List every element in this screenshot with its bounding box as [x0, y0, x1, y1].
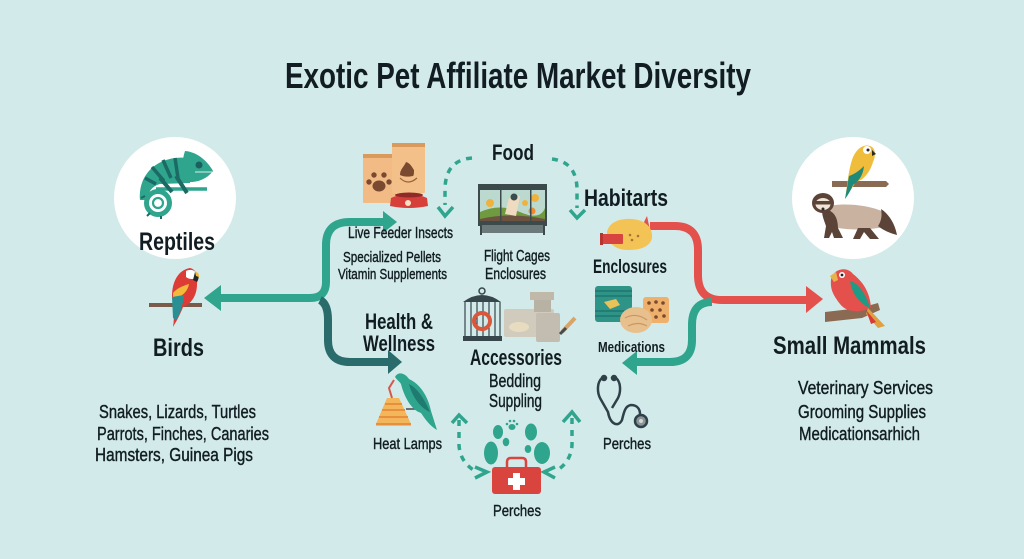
icon: chameleon: [140, 151, 213, 219]
icon: red parrot on branch: [825, 269, 885, 328]
arrow: teal to medications: [622, 302, 712, 375]
text block: left list: Snakes, Lizards, Turtles: [99, 402, 256, 422]
title: Exotic Pet Affiliate Market Diversity: [285, 55, 751, 96]
label: food: Food: [492, 140, 534, 165]
icon: food bags and bowl: [363, 143, 428, 208]
text block: flight cages: Enclosures: [485, 266, 546, 283]
text block: bedding supply: Bedding: [489, 371, 541, 391]
arrow: dark teal to health and wellness: [320, 300, 402, 374]
arrow: red to small mammals: [644, 216, 823, 313]
icon: stethoscope: [598, 376, 647, 427]
text block: bedding supply: [489, 371, 542, 411]
label: heat lamps: Heat Lamps: [373, 436, 442, 453]
arrow: teal to birds and feeder insects: [204, 211, 397, 311]
panel: reptiles badge: [114, 137, 236, 259]
text block: bedding supply: Suppling: [489, 391, 542, 411]
label: health and wellness: Health &: [365, 309, 433, 334]
text block: feeder list: Vitamin Supplements: [338, 266, 447, 283]
text block: right list: Veterinary Services: [798, 378, 933, 398]
text block: feeder list: Live Feeder Insects: [348, 225, 453, 242]
label: health and wellness: [363, 309, 435, 356]
label: habitarts: Habitarts: [584, 185, 668, 212]
icon: first aid kit: [492, 458, 541, 494]
icon: yellow habitat hide: [600, 219, 652, 250]
label: perches bottom: Perches: [493, 503, 541, 520]
text block: right list: [798, 378, 933, 444]
label: accessories: Accessories: [470, 345, 562, 370]
text block: right list: Medicationsarhich: [799, 424, 920, 444]
label: small mammals: Small Mammals: [773, 332, 926, 360]
label: reptiles: Reptiles: [139, 228, 215, 256]
label: health and wellness: Wellness: [363, 331, 435, 356]
text block: left list: Parrots, Finches, Canaries: [97, 424, 269, 444]
icon: yellow parrot on perch: [832, 146, 889, 199]
icon: tin and treats: [595, 286, 669, 333]
dashed arrows: bottom right: [544, 412, 580, 478]
text block: right list: Grooming Supplies: [798, 402, 926, 422]
icon: ferret: [812, 193, 897, 239]
text block: flight cages: [484, 248, 550, 283]
text block: feeder list: [338, 225, 453, 283]
icon: terrarium: [478, 184, 547, 235]
dashed arrow: food left: [438, 158, 472, 216]
dashed arrows: bottom left: [452, 415, 487, 478]
icon: macaw on perch: [149, 268, 202, 327]
label: medications: Medications: [598, 340, 665, 356]
text block: flight cages: Flight Cages: [484, 248, 550, 265]
panel: small mammals badge: [792, 137, 914, 259]
label: birds: Birds: [153, 334, 204, 362]
label: perches right: Perches: [603, 436, 651, 453]
dashed arrow: food right: [552, 159, 585, 218]
text block: feeder list: Specialized Pellets: [343, 249, 441, 266]
text block: left list: Hamsters, Guinea Pigs: [95, 445, 253, 465]
icon: bird with heat lamp: [376, 373, 437, 430]
label: enclosures: Enclosures: [593, 257, 667, 278]
text block: left list: [95, 402, 269, 465]
icon: paw prints: [484, 420, 550, 464]
icon: bird cage and accessories: [463, 288, 575, 342]
